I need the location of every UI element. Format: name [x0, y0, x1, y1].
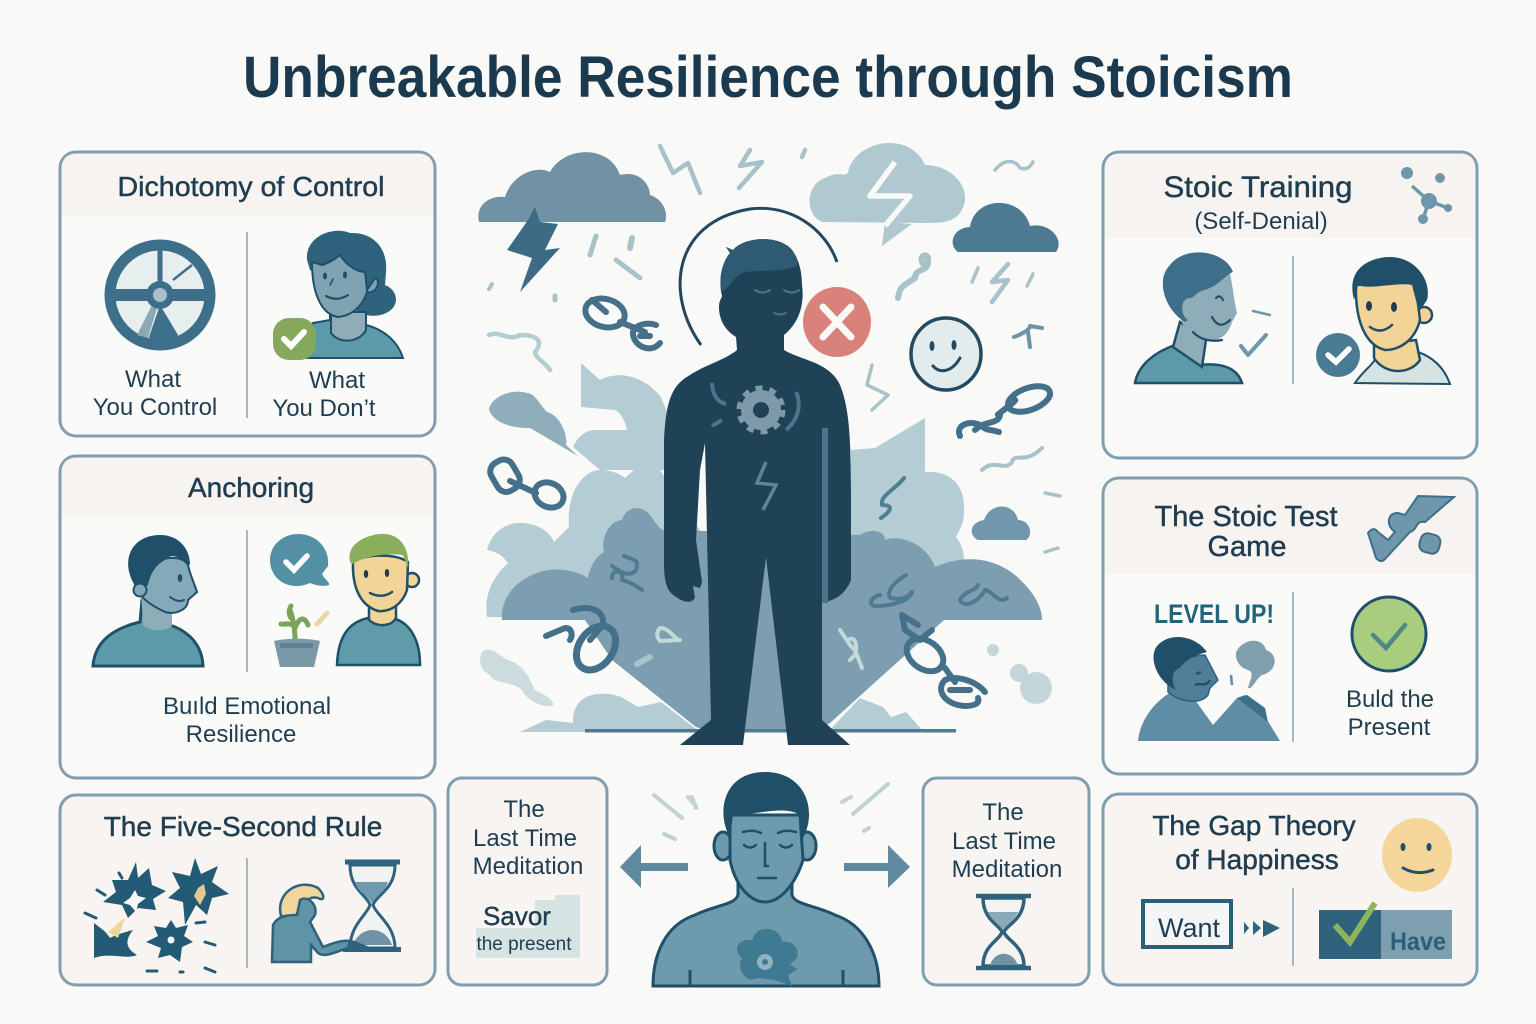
motion lines [654, 784, 888, 839]
heading: Game [1208, 531, 1286, 563]
heading: The Stoic Test [1154, 501, 1338, 533]
panel: anchoring [60, 456, 435, 778]
torso [653, 880, 879, 986]
hair [723, 772, 809, 838]
icon: smiling man [337, 534, 420, 665]
text: build the present: Present [1348, 714, 1431, 741]
icon: potted plant [274, 606, 327, 667]
text: last time meditation: The [503, 796, 545, 823]
panel: five-second rule [60, 795, 435, 985]
savor block [476, 895, 580, 958]
text: last time meditation: Meditation [952, 856, 1062, 883]
subheading: (Self-Denial) [1194, 208, 1328, 235]
text: what you don't [272, 367, 376, 422]
figure halo [680, 208, 837, 345]
storm: light back clouds [486, 363, 964, 732]
dots lower right [987, 644, 1052, 704]
arrow: right [844, 845, 910, 888]
central bottom figure [653, 772, 888, 986]
panel: stoic training [1103, 152, 1477, 458]
icon: red x badge [803, 287, 871, 357]
text: last time meditation: Last Time [952, 828, 1056, 855]
text: what you don't: You Don’t [272, 395, 376, 422]
ears [714, 832, 816, 860]
broken chains [487, 294, 1053, 706]
storm: small smoke cloud left [489, 392, 578, 456]
panel: dichotomy of control [60, 152, 435, 436]
icon: bursts [85, 858, 229, 972]
heading: Anchoring [188, 472, 314, 503]
icon: smiley face [911, 318, 981, 390]
chest lightning [757, 462, 776, 510]
icon: person in profile [93, 535, 203, 666]
heading: Stoic Training [1164, 171, 1352, 204]
icon: green check circle [1352, 597, 1426, 671]
icon: woman with check [273, 231, 403, 360]
heading: The Five-Second Rule [104, 811, 382, 842]
text: what you control [93, 366, 217, 421]
text: last time meditation: Meditation [473, 853, 583, 880]
text: what you don't: What [309, 367, 365, 394]
icon: puzzle check [1368, 496, 1454, 561]
text: what you control: You Control [93, 394, 217, 421]
text: build emotional resilience [163, 693, 331, 748]
heading: of Happiness [1175, 844, 1339, 875]
have box [1319, 903, 1452, 959]
text: build emotional resilience: Buıld Emotional [163, 693, 331, 720]
text: last time meditation [473, 796, 583, 880]
arrow: left [620, 845, 688, 888]
heading [1152, 810, 1356, 875]
facial features [743, 831, 796, 878]
central storm illustration [478, 143, 1060, 745]
icon: speech bubble check [270, 534, 329, 586]
savor block: the present [476, 934, 572, 955]
savor block: Savor [483, 901, 551, 931]
heading [1154, 501, 1338, 563]
cloud: upper left [478, 152, 666, 222]
text: level up: LEVEL UP! [1154, 599, 1274, 629]
icon: nodes [1401, 167, 1452, 224]
floating squiggles [489, 146, 1060, 552]
icon: man in profile [1135, 252, 1270, 383]
teal squiggles [881, 326, 1042, 518]
heading: The Gap Theory [1152, 810, 1356, 841]
heading: Dichotomy of Control [118, 171, 384, 202]
icon: smiling man with check [1316, 257, 1450, 384]
icon: ship wheel [110, 245, 210, 345]
lightning left [507, 207, 560, 292]
want box: Want [1158, 913, 1221, 943]
icon: man with mountain [1138, 637, 1280, 741]
lightning middle [870, 162, 912, 246]
text: build emotional resilience: Resilience [186, 721, 296, 748]
cloud: upper right [953, 203, 1059, 252]
light fragments inside cloud [637, 628, 862, 668]
cloud: small right [972, 506, 1030, 540]
panel: last time meditation left [448, 778, 607, 985]
text: last time meditation [952, 799, 1062, 883]
panel: stoic test game [1103, 478, 1477, 774]
icon: happy face [1382, 818, 1452, 892]
text: build the present [1346, 686, 1434, 741]
text: last time meditation: The [982, 799, 1024, 826]
storm: mid clouds [502, 508, 1042, 732]
icon: hourglass [976, 896, 1031, 968]
chain fragments inside cloud [612, 556, 1007, 606]
panel: gap theory [1103, 794, 1477, 985]
panel: last time meditation right [923, 778, 1089, 985]
standing figure [664, 239, 851, 745]
face [730, 815, 803, 902]
cloud: wisp lower left [480, 650, 553, 706]
ground line [585, 729, 956, 732]
text: last time meditation: Last Time [473, 825, 577, 852]
figure hair [720, 239, 797, 292]
want box [1143, 901, 1231, 947]
right arm strip [822, 428, 828, 603]
closed eyes and mouth [755, 290, 799, 314]
cloud: upper middle [810, 143, 965, 223]
arrows: want to have [1244, 920, 1280, 937]
text: build the present: Buld the [1346, 686, 1434, 713]
have box: Have [1390, 928, 1446, 956]
icon: flower on chest [737, 929, 798, 986]
icon: person with hourglass [272, 862, 401, 962]
text: what you control: What [125, 366, 181, 393]
gear on chest [712, 383, 799, 432]
title: Unbreakable Resilience through Stoicism [243, 45, 1293, 110]
